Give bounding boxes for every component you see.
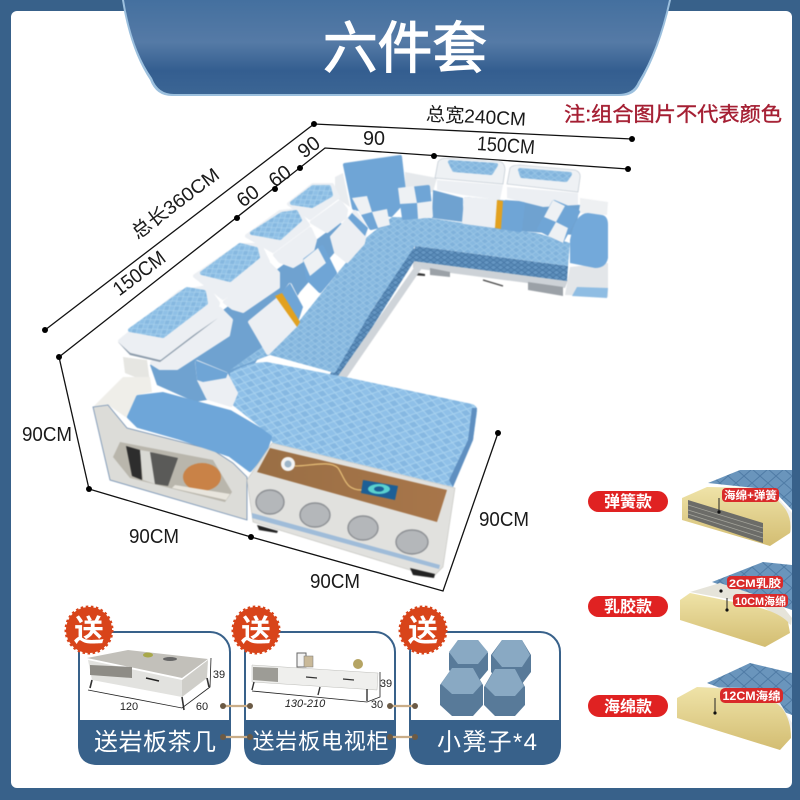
big side pillow — [250, 283, 303, 353]
dimension labels: 150CM — [109, 247, 170, 301]
large blue pillow — [345, 157, 405, 215]
charger and cable — [281, 457, 362, 490]
stools illustration — [440, 640, 531, 716]
option: latex — [588, 562, 792, 647]
pillows — [250, 157, 578, 353]
label: spring: 弹簧款 — [604, 492, 652, 511]
option: spring — [588, 470, 792, 546]
cushion: spring: 海绵+弹簧 — [724, 488, 777, 502]
label: foam: 海绵款 — [604, 697, 652, 716]
chaise seat — [230, 362, 477, 487]
free badge — [66, 607, 112, 653]
dimension labels: 60 — [233, 181, 264, 212]
coffee table illustration: 60 — [196, 701, 208, 713]
left pillow on chaise — [195, 360, 236, 405]
coffee table illustration: 39 — [213, 669, 225, 681]
dimension labels: 90 — [294, 132, 325, 163]
cushion: latex — [680, 562, 792, 647]
dimension labels: 90 — [363, 128, 385, 150]
free badge — [233, 607, 279, 653]
check pillow — [352, 195, 390, 228]
label: foam — [588, 695, 668, 717]
free badge: 送 — [74, 615, 104, 648]
wooden top — [257, 448, 447, 522]
header banner — [122, 0, 671, 96]
cushion: foam — [677, 663, 792, 750]
cushion: latex: 2CM乳胶 — [729, 576, 781, 590]
end table with speakers — [247, 443, 455, 578]
gift card: stools: 小凳子*4 — [437, 729, 537, 756]
option: foam — [588, 663, 792, 750]
dimension labels: 90CM — [479, 509, 529, 531]
cushion: latex: 10CM海绵 — [735, 594, 786, 608]
gift card: stools — [400, 607, 561, 765]
TV cabinet illustration — [252, 653, 392, 711]
dimension labels: 150CM — [476, 133, 536, 159]
rope links between cards — [220, 703, 418, 740]
dimension labels: 60 — [265, 161, 296, 192]
dimension lines — [42, 121, 635, 591]
label: spring — [588, 491, 668, 512]
free badge: 送 — [408, 615, 438, 648]
long orange-striped pillow — [464, 199, 523, 230]
free badge: 送 — [241, 615, 271, 648]
label: latex: 乳胶款 — [604, 597, 652, 616]
open storage shelf — [113, 442, 232, 502]
coffee table illustration — [87, 650, 225, 713]
check pillow — [398, 186, 433, 219]
right arm — [565, 198, 608, 298]
dimension labels: 90CM — [129, 526, 179, 548]
side pillow — [332, 212, 368, 261]
side check pillow — [303, 247, 335, 291]
armrest cushion — [129, 394, 270, 470]
gift card: coffee table: 送岩板茶几 — [94, 729, 216, 756]
coffee table illustration: 120 — [120, 701, 138, 713]
corner and side seats — [230, 217, 570, 380]
cushion: spring — [682, 470, 792, 546]
TV cabinet illustration: 39 — [380, 678, 392, 690]
dimension labels — [22, 103, 536, 593]
dimension labels: 90CM — [310, 571, 360, 593]
left arm — [93, 377, 270, 520]
title: 六件套 — [323, 17, 487, 80]
free badge — [400, 607, 446, 653]
dimension labels: 90CM — [22, 424, 72, 446]
gift card: coffee table — [66, 607, 231, 765]
gift card: TV cabinet — [233, 607, 396, 765]
sofa — [93, 157, 608, 578]
tilted pillow — [539, 200, 578, 243]
cushion: foam: 12CM海绵 — [722, 689, 780, 703]
dimension labels: 总宽240CM — [425, 103, 526, 131]
back section: right headrests and backs — [335, 158, 580, 235]
note: colours: 注:组合图片不代表颜色 — [564, 103, 782, 126]
TV cabinet illustration: 130-210 — [285, 698, 326, 710]
TV cabinet illustration: 30 — [371, 699, 383, 711]
gift card: TV cabinet: 送岩板电视柜 — [252, 729, 388, 754]
dimension labels: 总长360CM — [127, 164, 224, 244]
phone — [361, 480, 398, 500]
speakers — [256, 490, 428, 554]
back section: left headrests and backs — [118, 185, 350, 402]
label: latex — [588, 596, 668, 617]
